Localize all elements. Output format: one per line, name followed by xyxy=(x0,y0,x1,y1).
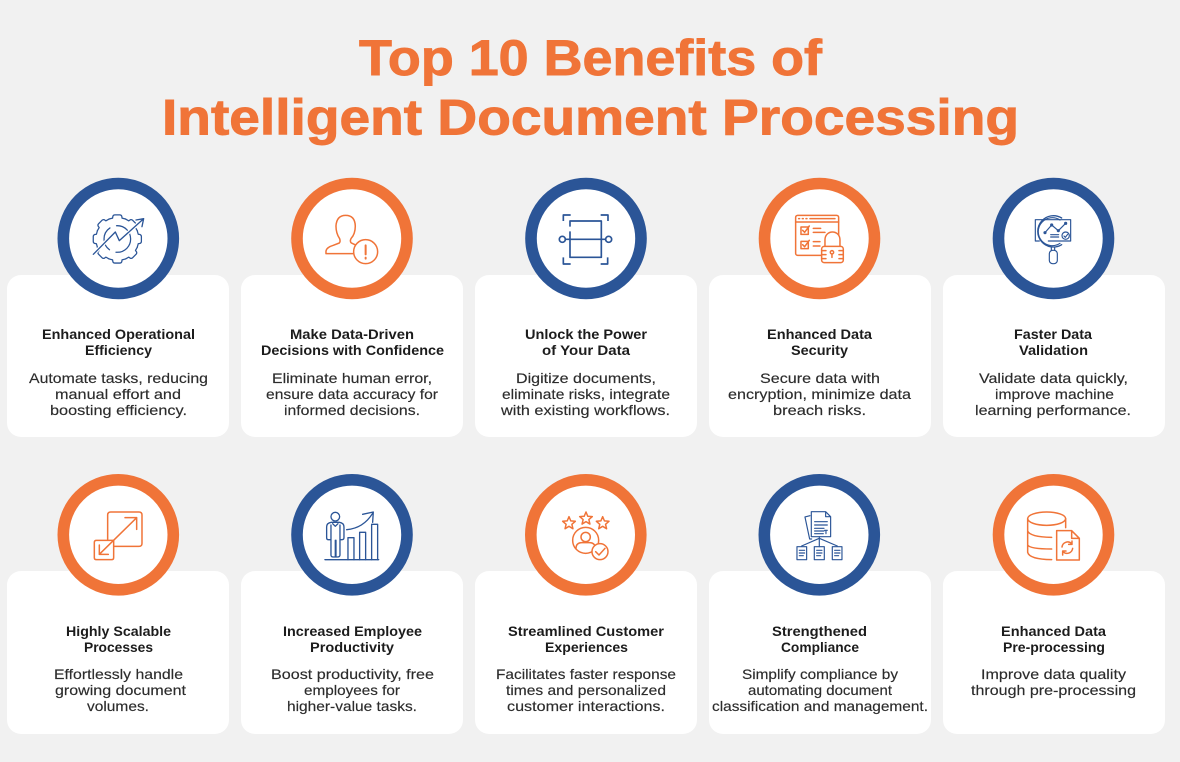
panel: Faster Data Validation: Validation xyxy=(1019,343,1088,358)
panel: Enhanced Data Pre-processing: Pre-processing xyxy=(1003,640,1105,655)
panel: Enhanced Data Pre-processing: Improve data quality xyxy=(981,666,1126,682)
icon: scan frame xyxy=(559,215,612,264)
panel: Make Data-Driven Decisions with Confidence: Decisions with Confidence xyxy=(261,343,445,358)
title: Top 10 Benefits of xyxy=(359,30,822,86)
panel: Make Data-Driven Decisions with Confidence: Make Data-Driven xyxy=(290,327,414,342)
panel: Strengthened Compliance: Compliance xyxy=(781,640,859,655)
panel: Strengthened Compliance: Simplify compliance by xyxy=(742,666,898,682)
panel: Faster Data Validation xyxy=(943,184,1165,437)
panel: Make Data-Driven Decisions with Confidence: ensure data accuracy for xyxy=(266,386,438,402)
panel: Strengthened Compliance xyxy=(709,480,931,734)
panel: Enhanced Data Security: breach risks. xyxy=(773,402,866,418)
panel: Enhanced Data Pre-processing xyxy=(943,480,1165,734)
title: Intelligent Document Processing xyxy=(162,90,1019,146)
panel: Highly Scalable Processes: Highly Scalable xyxy=(66,624,172,639)
panel: Increased Employee Productivity: employees for xyxy=(304,682,400,698)
icon: magnifier over chart xyxy=(1035,216,1071,264)
panel: Increased Employee Productivity: Productivity xyxy=(310,640,395,655)
panel: Faster Data Validation: Faster Data xyxy=(1014,327,1093,342)
panel: Highly Scalable Processes: Effortlessly handle xyxy=(54,666,183,682)
panel: Unlock the Power of Your Data: of Your Data xyxy=(542,343,631,358)
panel: Strengthened Compliance: Strengthened xyxy=(772,624,867,639)
panel: Highly Scalable Processes xyxy=(7,480,229,734)
panel: Enhanced Data Pre-processing: through pre-processing xyxy=(971,682,1136,698)
icon: customer with star rating xyxy=(563,512,609,560)
icon: document hierarchy xyxy=(797,512,842,560)
panel: Increased Employee Productivity: higher-value tasks. xyxy=(287,698,417,714)
title xyxy=(162,30,1019,146)
panel: Unlock the Power of Your Data: eliminate risks, integrate xyxy=(502,386,670,402)
icon: employee with growth chart xyxy=(325,512,379,560)
panel: Faster Data Validation: learning performance. xyxy=(975,402,1131,418)
panel: Make Data-Driven Decisions with Confidence: Eliminate human error, xyxy=(272,370,432,386)
panel: Streamlined Customer Experiences xyxy=(475,480,697,734)
icon: gear with rising arrow xyxy=(93,215,144,263)
panel: Make Data-Driven Decisions with Confidence xyxy=(241,184,463,437)
panel: Streamlined Customer Experiences: Streamlined Customer xyxy=(508,624,665,639)
panel: Streamlined Customer Experiences: customer interactions. xyxy=(507,698,665,714)
icon: browser window with padlock xyxy=(796,215,843,263)
panel: Enhanced Operational Efficiency: Automate tasks, reducing xyxy=(29,370,208,386)
panel: Unlock the Power of Your Data: Digitize documents, xyxy=(516,370,656,386)
panel: Highly Scalable Processes: growing document xyxy=(55,682,186,698)
icon: person with alert xyxy=(326,215,378,264)
panel: Unlock the Power of Your Data: Unlock the Power xyxy=(525,327,648,342)
panel: Unlock the Power of Your Data xyxy=(475,184,697,437)
panel: Increased Employee Productivity: Boost productivity, free xyxy=(271,666,434,682)
panel: Enhanced Operational Efficiency xyxy=(7,184,229,437)
panel: Enhanced Data Security: Secure data with xyxy=(760,370,880,386)
panel: Increased Employee Productivity xyxy=(241,480,463,734)
panel: Enhanced Operational Efficiency: boosting efficiency. xyxy=(50,402,187,418)
panel: Streamlined Customer Experiences: Experiences xyxy=(545,640,628,655)
panel: Unlock the Power of Your Data: with existing workflows. xyxy=(500,402,670,418)
icon: database with document refresh xyxy=(1028,512,1079,560)
panel: Faster Data Validation: improve machine xyxy=(995,386,1114,402)
panel: Enhanced Operational Efficiency: Efficiency xyxy=(85,343,153,358)
panel: Streamlined Customer Experiences: times and personalized xyxy=(506,682,666,698)
panel: Streamlined Customer Experiences: Facilitates faster response xyxy=(496,666,676,682)
panel: Strengthened Compliance: classification and management. xyxy=(712,698,928,714)
panel: Enhanced Data Pre-processing: Enhanced Data xyxy=(1001,624,1107,639)
panel: Make Data-Driven Decisions with Confidence: informed decisions. xyxy=(284,402,420,418)
panel: Enhanced Operational Efficiency: Enhanced Operational xyxy=(42,327,195,342)
panel: Highly Scalable Processes: Processes xyxy=(84,640,153,655)
panel: Enhanced Data Security: Enhanced Data xyxy=(767,327,873,342)
panel: Faster Data Validation: Validate data quickly, xyxy=(979,370,1128,386)
panel: Enhanced Operational Efficiency: manual effort and xyxy=(55,386,181,402)
panel: Enhanced Data Security: Security xyxy=(791,343,849,358)
panel: Highly Scalable Processes: volumes. xyxy=(87,698,149,714)
icon: resize arrow squares xyxy=(94,512,142,560)
panel: Enhanced Data Security xyxy=(709,184,931,437)
panel: Enhanced Data Security: encryption, minimize data xyxy=(728,386,911,402)
panel: Increased Employee Productivity: Increased Employee xyxy=(283,624,423,639)
panel: Strengthened Compliance: automating document xyxy=(748,682,892,698)
